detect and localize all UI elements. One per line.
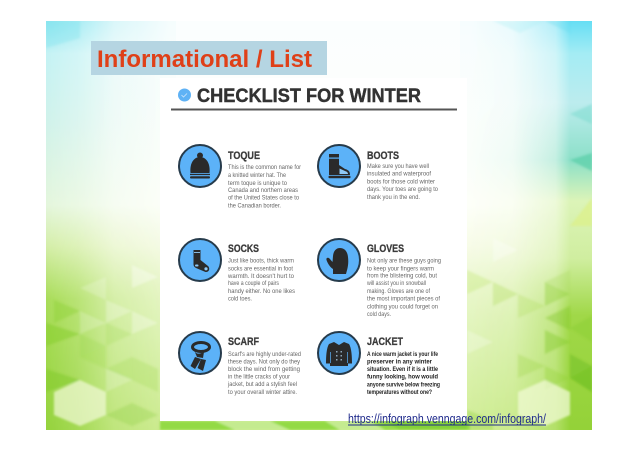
title text: CHECKLIST FOR WINTER: [197, 85, 421, 107]
description: days. Your toes are going to: [367, 187, 439, 193]
label: BOOTS: [367, 150, 399, 162]
description: Make sure you have well: [367, 164, 429, 170]
label: GLOVES: [367, 243, 404, 255]
description: to your overall winter attire.: [228, 390, 297, 396]
description: will assist you in snowball: [366, 281, 426, 287]
description: cold toes.: [228, 296, 252, 302]
description: block the wind from getting: [228, 367, 300, 373]
item: socks: [179, 239, 295, 302]
icon: scarf: [179, 332, 221, 374]
item: boots: [318, 145, 439, 201]
panel: white checklist sheet: [160, 78, 467, 421]
label: JACKET: [367, 336, 403, 348]
description: making. Gloves are one of: [367, 289, 430, 295]
description: cold days.: [367, 312, 391, 318]
title underline: [171, 108, 457, 110]
description: [367, 164, 439, 201]
description: thank you in the end.: [367, 195, 420, 201]
description: anyone survive below freezing: [367, 382, 440, 388]
description: clothing you could forget on: [367, 304, 438, 310]
icon: winter hat: [179, 145, 221, 187]
description: have a couple of pairs: [228, 281, 279, 287]
description: socks are essential in foot: [228, 266, 293, 272]
description: in the little cracks of your: [228, 374, 290, 380]
description: temperatures without one?: [367, 390, 432, 396]
description: A nice warm jacket is your life: [367, 352, 439, 358]
description: situation. Even if it is a little: [367, 367, 439, 373]
description: funny looking, how would: [367, 374, 438, 380]
description: Scarf's are highly under-rated: [228, 352, 301, 358]
description: jacket, but add a stylish feel: [227, 382, 297, 388]
description: from the blistering cold, but: [367, 274, 437, 280]
description: term toque is unique to: [228, 181, 288, 187]
description: of the United States close to: [228, 196, 300, 202]
description: preserver in any winter: [367, 360, 433, 366]
icon: mitten: [318, 239, 360, 281]
heading: checklist for winter: [178, 85, 421, 107]
description: [367, 352, 440, 396]
icon: boot: [318, 145, 360, 187]
item: gloves: [318, 239, 441, 318]
icon: blue check badge: [178, 88, 191, 102]
description: boots for those cold winter: [367, 180, 435, 186]
description: [228, 165, 301, 210]
description: This is the common name for: [228, 165, 301, 171]
description: [366, 258, 441, 318]
description: Canada and northern areas: [228, 188, 298, 194]
icon: jacket: [318, 332, 360, 374]
background: geometric cyan and green triangles: [46, 21, 592, 430]
description: warmth. It doesn't hurt to: [227, 274, 295, 280]
description: insulated and waterproof: [367, 172, 431, 178]
description: these days. Not only do they: [228, 360, 300, 366]
icon: sock: [179, 239, 221, 281]
description: [227, 352, 301, 396]
description: Not only are these guys going: [367, 258, 441, 264]
description: handy either. No one likes: [228, 289, 295, 295]
source link: https://infograph.venngage.com/infograph/: [348, 412, 546, 426]
item: toque: [179, 145, 301, 210]
description: a knitted winter hat. The: [228, 173, 287, 179]
label: SCARF: [228, 336, 259, 348]
label: SOCKS: [228, 243, 259, 255]
banner: informational / list: Informational / List: [97, 46, 312, 73]
description: [227, 258, 295, 302]
description: to keep your fingers warm: [367, 266, 434, 272]
description: Just like boots, thick warm: [228, 258, 294, 264]
description: the Canadian border.: [228, 204, 281, 210]
item: scarf: [179, 332, 301, 396]
label: TOQUE: [228, 150, 260, 162]
item: jacket: [318, 332, 440, 396]
description: the most important pieces of: [367, 296, 440, 302]
